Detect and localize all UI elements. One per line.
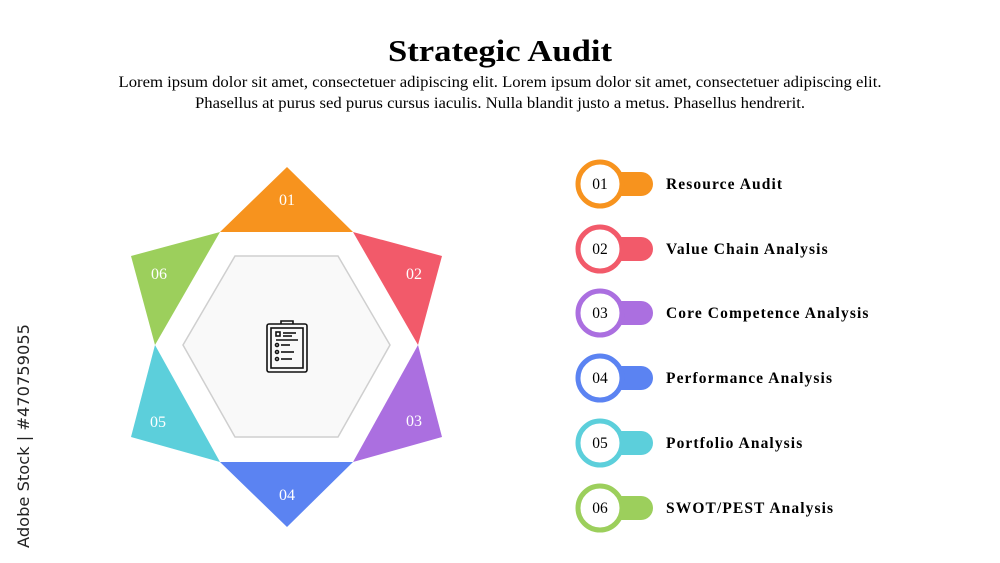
- title: Strategic Audit: [388, 33, 613, 68]
- item 03: [578, 291, 869, 335]
- segment 01: 01: [279, 192, 295, 209]
- subtitle text: Phasellus at purus sed purus cursus iaculis. Nulla blandit justo a metus. Phasellus hendrerit.: [195, 95, 805, 112]
- icon: clipboard: [267, 321, 307, 372]
- item 01: [578, 162, 783, 206]
- segment 03: 03: [406, 413, 422, 430]
- side credit: Adobe Stock | #470759055: [14, 324, 33, 548]
- item 06: 06: [592, 500, 608, 517]
- item 03: 03: [592, 305, 608, 322]
- item 04: 04: [592, 370, 608, 387]
- item 04: [578, 356, 833, 400]
- segment 04: 04: [279, 487, 295, 504]
- item 01: 01: [592, 176, 608, 193]
- segment 05: 05: [150, 414, 166, 431]
- item 02: Value Chain Analysis: [666, 241, 829, 258]
- item 02: [578, 227, 829, 271]
- subtitle text: [118, 74, 882, 112]
- item 06: [578, 486, 834, 530]
- center hexagon: [183, 256, 390, 437]
- segment 01: [220, 167, 353, 232]
- item 05: 05: [592, 435, 608, 452]
- segment 06: [131, 232, 220, 345]
- list: [578, 162, 869, 530]
- item 05: [578, 421, 803, 465]
- item 02: 02: [592, 241, 608, 258]
- item 05: Portfolio Analysis: [666, 435, 803, 452]
- segment 03: [353, 345, 442, 462]
- segment 04: [220, 462, 353, 527]
- item 01: Resource Audit: [666, 176, 783, 193]
- subtitle text: Lorem ipsum dolor sit amet, consectetuer adipiscing elit. Lorem ipsum dolor sit amet, consectetuer adipiscing elit.: [118, 74, 882, 91]
- item 06: SWOT/PEST Analysis: [666, 500, 834, 517]
- segment 05: [131, 345, 220, 462]
- item 04: Performance Analysis: [666, 370, 833, 387]
- item 03: Core Competence Analysis: [666, 305, 869, 322]
- segment 02: [353, 232, 442, 345]
- segment 06: 06: [151, 266, 167, 283]
- star diagram: [131, 167, 442, 527]
- segment 02: 02: [406, 266, 422, 283]
